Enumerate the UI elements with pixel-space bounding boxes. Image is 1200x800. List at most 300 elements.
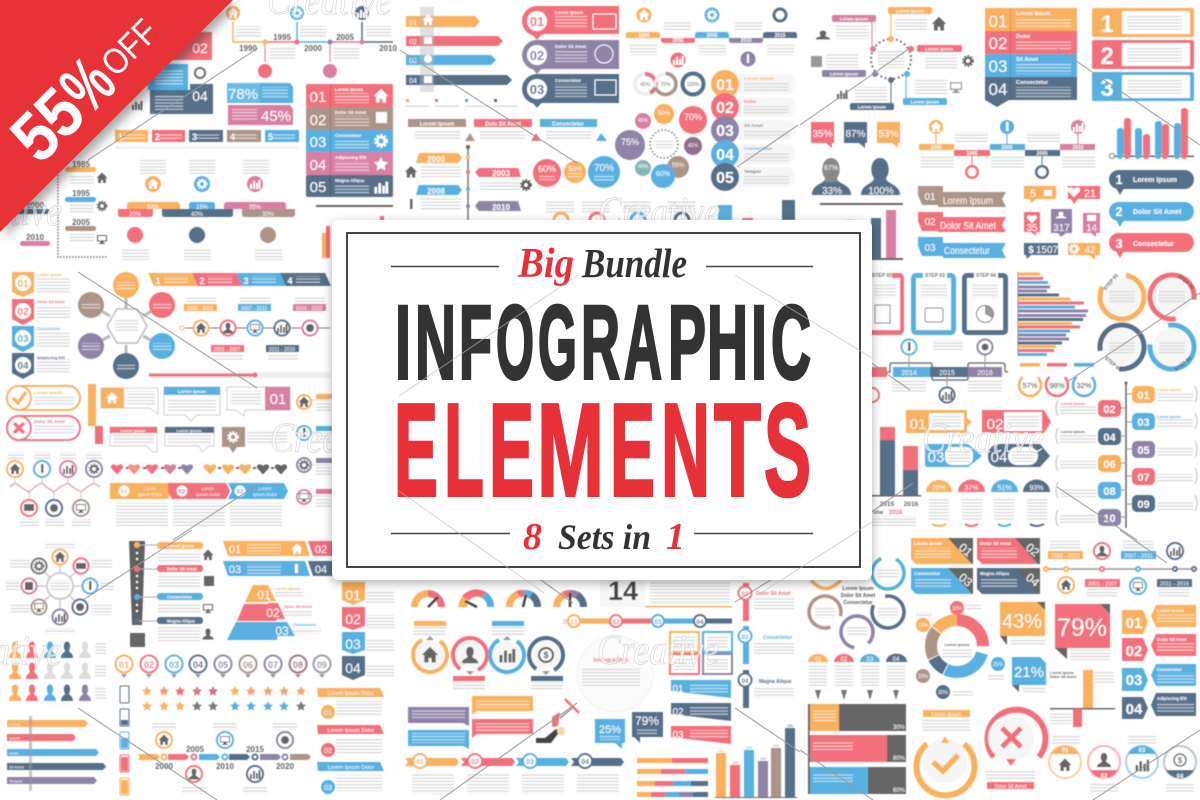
heading: 8 Sets in 1: Sets in xyxy=(558,517,651,557)
heading: ELEMENTS: L xyxy=(444,376,484,524)
social counters: 14 xyxy=(1086,223,1097,234)
stacked bar chart 2014-2016 xyxy=(860,427,921,526)
percent bars with icons: 20% xyxy=(129,212,142,218)
3D pyramid: 01 xyxy=(257,588,271,602)
inner frame xyxy=(347,233,860,567)
up down bar chart xyxy=(1050,670,1115,727)
arrow bar chart bottom left xyxy=(7,716,106,791)
arrow bar chart bottom left: Ipsum xyxy=(9,736,21,740)
heading: INFOGRAPHIC: G xyxy=(538,284,577,402)
timeline 1988-2016 top right xyxy=(1044,540,1196,597)
arrow panels 01-04 right: Adipiscing Elit xyxy=(1157,696,1187,701)
timeline with node circles xyxy=(180,296,330,361)
heading: Big Bundle: Big xyxy=(517,241,574,287)
stacked list 01-05: 02 xyxy=(310,112,326,129)
arrow text columns 01-04 xyxy=(405,754,624,794)
vertical timeline 1985-2010: 2005 xyxy=(72,218,90,227)
heading: INFOGRAPHIC: I xyxy=(751,284,767,402)
stacked list 01-05: Dolor Sit Amet xyxy=(335,110,367,115)
stacked list 01-04 with arrow: 01 xyxy=(989,12,1007,31)
location pin list 01-03: 01 xyxy=(530,14,544,29)
folded corner cards 01-04: Magna Aliqua xyxy=(980,571,1010,576)
heading: ELEMENTS: T xyxy=(714,376,761,524)
arrow timeline 2000-2020 xyxy=(138,721,311,794)
circle cluster diagram xyxy=(615,104,707,188)
timeline with node circles: 2016 - 2020 xyxy=(296,306,323,312)
step rings: STEP 01 xyxy=(1103,273,1120,292)
arrow bar chart bottom left: Lorem xyxy=(9,722,21,726)
arrow bar chart bottom left: Dolor xyxy=(9,750,19,756)
timeline 1990-2010 flat: 2000 xyxy=(1001,145,1013,151)
numbered pills: Lorem Ipsum xyxy=(1133,177,1177,184)
timeline 1990-2010: 2010 xyxy=(379,44,397,53)
heading: INFOGRAPHIC: A xyxy=(624,284,662,402)
heading: Big Bundle: Bundle xyxy=(581,240,687,286)
hero title panel xyxy=(332,220,872,580)
vertical timeline 01-10: 08 xyxy=(1103,486,1116,498)
exclamation timeline: Lorem Ipsum xyxy=(167,544,194,548)
stacked list 01-04 with arrow: 02 xyxy=(989,34,1007,53)
large percent folded cards xyxy=(1000,602,1110,693)
ribbon headers: Dolo Sit Amet xyxy=(485,122,521,128)
circular network diagram xyxy=(6,542,114,634)
social counters: 1507 xyxy=(1036,245,1059,256)
big number 14: 14 xyxy=(608,576,638,606)
step cards xyxy=(848,271,1008,335)
vertical timeline 1985-2010: 2000 xyxy=(26,201,44,210)
horizontal arrow bars: 03 xyxy=(409,58,417,65)
social counters: 21 xyxy=(1084,188,1096,200)
folded banners 01-03: 03 xyxy=(672,730,684,741)
parallelogram ribbons xyxy=(223,541,335,576)
vertical timeline 01-10: 10 xyxy=(1103,513,1116,525)
speech boxes row one: Lorem Ipsum xyxy=(178,389,206,394)
column chart six bars: 204 xyxy=(773,744,779,748)
circle list 01-05: 01 xyxy=(716,77,734,94)
vertical pin list 02-04: 04 xyxy=(742,679,749,685)
timeline 1990-2010 xyxy=(226,6,397,78)
numbered boxes 1-3: 2 xyxy=(1100,43,1114,70)
four icon rings: $ xyxy=(543,650,549,660)
ribbon labels 01-03: Dolor Sit Amet xyxy=(940,221,996,232)
numbered boxes 1-3 xyxy=(1092,8,1194,102)
cross ring: Dolor Sit Amet xyxy=(995,784,1027,790)
timeline 1988-2016 top right: 2007 - 2011 xyxy=(1124,554,1153,560)
circle cluster diagram: 41% xyxy=(688,143,699,149)
arrow panels 01-04 right: 03 xyxy=(1126,672,1142,689)
bar chart behind panel right xyxy=(820,203,903,260)
donut chart: 10% xyxy=(952,606,963,612)
step cards: STEP 03 xyxy=(925,273,945,279)
circle cluster diagram: 70% xyxy=(684,112,702,122)
heading: ELEMENTS: E xyxy=(394,376,438,524)
ribbon timeline 2000-2010 xyxy=(405,145,531,220)
3D pyramid: Dolor Sit Amet xyxy=(284,604,312,609)
3D pyramid: 02 xyxy=(266,606,280,620)
ribbon labels 01-03: 03 xyxy=(924,243,936,254)
percent pills column xyxy=(926,480,1050,526)
numbered pills: Dolor Sit Amet xyxy=(1133,209,1182,216)
badges 01-04 left: 01 xyxy=(17,279,29,290)
step parallelograms: 1 xyxy=(155,276,161,286)
stacked list 01-05: Magna Aliqua xyxy=(335,178,365,183)
timeline 1988-2016 top right: 2001 - 2007 xyxy=(1088,582,1117,588)
timeline 1990-2010: 2000 xyxy=(304,44,322,53)
ribbon list with circles: 03 xyxy=(324,785,332,792)
percent bars with icons: 50% xyxy=(147,205,160,211)
stacked list 01-04 with arrow: Sit Amet xyxy=(1016,57,1038,63)
boxed timeline 2014-2016: 2014 xyxy=(901,370,917,377)
numbered pins 01-09: 01 xyxy=(119,660,129,670)
ribbon list with circles: Lorem Ipsum Dolor xyxy=(328,728,375,734)
Creative Market watermarks: Creative xyxy=(270,416,392,462)
badges 01-04 left: Consectetur xyxy=(37,326,61,331)
vertical timeline 1985-2010: 1985 xyxy=(72,160,90,169)
exclamation timeline xyxy=(129,541,214,647)
ribbon list with circles: 01 xyxy=(324,710,332,717)
percent gauges 57 98 32: 57% xyxy=(1022,381,1038,390)
timeline 1990-2010 flat: 1990 xyxy=(930,145,942,151)
check and cross pills: Dolor Sit Amet xyxy=(34,419,66,424)
cross ring xyxy=(986,710,1046,790)
stacked bar chart 2014-2016: 2016 xyxy=(904,501,919,508)
timeline 1995-2015 with icons: 2000 xyxy=(672,38,684,44)
3D pyramid: 03 xyxy=(275,624,289,638)
timeline 1995-2015 with icons xyxy=(626,8,797,68)
timeline 1990-2010 flat: 2010 xyxy=(1072,145,1084,151)
vertical pin list 02-04: 02 xyxy=(742,592,749,598)
circular process with labels: Lorem Ipsum xyxy=(925,46,953,52)
sale corner banner xyxy=(0,0,233,232)
heading: ELEMENTS: S xyxy=(764,376,811,524)
percent speech badges 25 79: 79% xyxy=(635,714,659,728)
arrow panels 01-04 right: 01 xyxy=(1126,615,1142,632)
arrow text columns 01-04: 02 xyxy=(471,759,479,766)
horizontal arrow bars: 02 xyxy=(409,39,417,46)
speech boxes row two xyxy=(110,427,287,453)
folded corner cards 01-04: 03 xyxy=(956,570,975,590)
percent pills column: 37% xyxy=(964,485,979,492)
person percent figures: 67% xyxy=(824,165,838,172)
donut chart: 30% xyxy=(938,690,949,696)
circle list 01-05: Dolor xyxy=(744,99,757,105)
heading: INFOGRAPHIC: R xyxy=(581,284,620,402)
five numbered tabs: 5 xyxy=(268,132,273,142)
parallelogram ribbons: 04 xyxy=(315,564,327,576)
stacked list 01-04 with arrow: 04 xyxy=(989,80,1007,99)
gray progress panels: 60% xyxy=(893,788,906,794)
donut gauges: 100% xyxy=(687,82,700,88)
badges 01-04 below panel: 02 xyxy=(345,611,361,627)
circle list 01-05: Tempor xyxy=(744,169,761,175)
step rings: STEP 04 xyxy=(1103,356,1122,373)
big number 14 xyxy=(600,576,732,608)
ribbon list with circles xyxy=(317,688,384,794)
percent bars with icons xyxy=(118,160,295,260)
stacked list 01-05: Adipiscing Elit xyxy=(335,155,367,160)
3D pyramid: Lorem Ipsum xyxy=(275,586,301,591)
gray progress panels: 80% xyxy=(893,756,906,762)
large percent folded cards: 43% xyxy=(1002,611,1042,633)
parallelogram ribbons: 02 xyxy=(315,544,327,556)
column chart six bars: 193 xyxy=(746,746,752,750)
light watermark lines over panel xyxy=(399,275,872,593)
check ring: Lorem Ipsum xyxy=(932,712,961,718)
numbered pills xyxy=(1109,170,1194,258)
numbered pins 01-09: 02 xyxy=(144,660,154,670)
numbered arrow boxes 01-04 xyxy=(906,410,1051,467)
circle cards 01-04: $ xyxy=(1178,756,1183,765)
vertical timeline 01-10 xyxy=(1056,382,1197,528)
speech percent badges: 53% xyxy=(878,129,899,140)
badges 01-04 left: Lorem Ipsum xyxy=(37,272,63,277)
social counters: 35 xyxy=(1026,223,1038,234)
ribbon headers xyxy=(408,119,607,141)
sale corner banner: 5 xyxy=(19,73,99,153)
batteries xyxy=(120,686,129,795)
five numbered tabs: 2 xyxy=(155,132,160,142)
circle cards 01-04: 04 xyxy=(1177,774,1184,780)
numbered pins 01-09: 06 xyxy=(243,660,253,670)
heading: INFOGRAPHIC: P xyxy=(668,284,706,402)
percent pills column: 93% xyxy=(1029,485,1044,492)
circle cluster diagram: 55% xyxy=(672,163,685,169)
timeline with node circles: 2011 - 2016 xyxy=(269,347,295,353)
speech rectangles xyxy=(408,696,533,749)
horizontal arrow bars: 04 xyxy=(409,78,417,85)
sale corner banner: % xyxy=(45,42,130,127)
up down bar chart: Dolor Sit Amet xyxy=(1050,675,1077,679)
vertical timeline 01-10: 03 xyxy=(1137,417,1150,429)
five numbered tabs: 4 xyxy=(230,132,235,142)
check ring xyxy=(916,710,975,795)
circular process with labels: Lorem Ipsum xyxy=(830,72,858,76)
step arrow row 01-04: 01 xyxy=(570,619,578,626)
boxed timeline 2014-2016 xyxy=(860,340,1008,402)
Creative Market watermarks: Creative xyxy=(598,190,720,236)
step arrow row 01-04: 02 xyxy=(612,619,620,626)
heading: ELEMENTS: M xyxy=(537,376,604,524)
badges 01-04 left: 02 xyxy=(17,307,29,318)
panel: numbered folded labels 02 and 04: 04 xyxy=(192,88,208,104)
badges 01-04 left: 03 xyxy=(17,334,29,345)
heading: INFOGRAPHIC: F xyxy=(459,284,492,402)
vertical timeline 01-10: 05 xyxy=(1137,445,1150,457)
badges 01-04 below panel: 04 xyxy=(345,660,361,676)
arrow timeline 2000-2020: 2010 xyxy=(216,762,234,771)
timeline 1990-2010 flat xyxy=(919,120,1095,179)
star ratings xyxy=(142,686,306,710)
five numbered tabs: 1 xyxy=(118,132,123,142)
numbered boxes 1-3: 1 xyxy=(1100,11,1114,38)
white circle with Infographic label: Infographic xyxy=(593,657,629,664)
vertical timeline 01-10: 02 xyxy=(1103,404,1116,416)
location pin list 01-03: 02 xyxy=(530,48,544,63)
numbered pins 01-09: 04 xyxy=(193,660,203,670)
horizontal arrow bars xyxy=(406,7,518,108)
location pin list 01-03 xyxy=(522,6,619,108)
step arrow row 01-04: 03 xyxy=(654,619,662,626)
numbered pills: 3 xyxy=(1115,236,1123,251)
social counters: 317 xyxy=(1053,223,1070,234)
stacked list 01-05: Consectetur xyxy=(335,133,362,138)
numbered pins 01-09: 05 xyxy=(218,660,228,670)
timeline 1990-2010 flat: 2005 xyxy=(1036,151,1048,157)
location pin list 01-03: 03 xyxy=(530,82,544,97)
arrowhead pills 01-04 xyxy=(808,654,907,700)
arrow banners 01-03: Lorem xyxy=(259,486,272,491)
sale corner banner: OFF xyxy=(93,11,165,84)
numbered pins 01-09: 09 xyxy=(317,660,327,670)
column chart six bars: 146 xyxy=(760,757,766,761)
numbered arrow boxes 01-04: 02 xyxy=(987,416,1003,433)
timeline 1990-2010: 2005 xyxy=(336,33,354,42)
arrow panels 01-04 right: Lorem Ipsum xyxy=(1157,608,1184,613)
social counters: 5 xyxy=(1030,188,1036,200)
network of icons xyxy=(7,452,102,527)
folded corner cards 01-04: Lorem Ipsum xyxy=(914,541,942,546)
numbered boxes 1-3: 3 xyxy=(1100,75,1114,102)
heading: ELEMENTS: N xyxy=(661,376,710,524)
arrow text columns 01-04: 03 xyxy=(526,759,534,766)
parallelogram ribbons: 01 xyxy=(229,544,241,556)
percent gauges 57 98 32: 32% xyxy=(1076,381,1092,390)
Creative Market watermarks xyxy=(0,0,1044,675)
stacked list 01-04 with arrow xyxy=(985,8,1077,107)
speech boxes row one xyxy=(101,387,290,421)
vertical timeline 01-10: 01 xyxy=(1137,390,1150,402)
circle cluster diagram: 75% xyxy=(621,137,639,147)
boxed timeline 2014-2016: 2015 xyxy=(939,370,955,377)
circle list 01-05: 03 xyxy=(716,123,734,140)
column chart six bars: 285 xyxy=(787,724,793,728)
arrow banners 01-03: Ipsum Dolor xyxy=(138,492,163,497)
arrow banners 01-03: 02 xyxy=(179,490,186,496)
arrow banners 01-03 xyxy=(110,483,288,527)
badges 01-04 left: Adipiscing Elit xyxy=(37,355,65,360)
arrow timeline 2000-2020: 2020 xyxy=(276,762,294,771)
white circle with Infographic label xyxy=(577,636,653,712)
heading: Big Bundle xyxy=(391,240,813,287)
ribbon timeline 2000-2010: 2008 xyxy=(427,187,445,196)
vertical timeline 01-10: Lorem Ipsum xyxy=(1061,402,1085,406)
vertical pin list 02-04: Dolor Sit Amet xyxy=(756,591,791,597)
folded banners 01-03 xyxy=(671,680,731,744)
ribbon headers: Consectetur xyxy=(552,122,585,128)
panel: numbered folded labels 02 and 04 xyxy=(132,32,213,114)
heading: INFOGRAPHIC: O xyxy=(496,284,534,402)
person percent figures xyxy=(812,158,900,197)
3D pyramid: Consectetur xyxy=(293,622,317,627)
circle cards 01-04: 01 xyxy=(1062,748,1069,754)
step rings below panel xyxy=(804,551,910,651)
badges 01-04 left xyxy=(12,272,70,379)
stacked list 01-04 with arrow: 03 xyxy=(989,57,1007,76)
stacked list 01-05: 05 xyxy=(310,179,326,196)
circle cards 01-04: 03 xyxy=(1139,748,1146,754)
vertical timeline 01-10: Lorem Ipsum xyxy=(1157,388,1181,392)
step parallelograms xyxy=(148,273,331,286)
numbered pins 01-09: 08 xyxy=(293,660,303,670)
timeline with node circles: 2007 - 2011 xyxy=(241,306,267,312)
timeline 1990-2010: 1995 xyxy=(273,33,291,42)
percent circles 60 50 70 xyxy=(533,156,620,188)
speech boxes row one: 01 xyxy=(270,391,286,408)
percent gauges 57 98 32: 98% xyxy=(1049,381,1065,390)
percent circles 60 50 70: 70% xyxy=(594,163,614,174)
vertical timeline 01-10: 06 xyxy=(1103,459,1116,471)
percent circles 60 50 70: 60% xyxy=(538,164,556,174)
timeline 1995-2015 with icons: 2010 xyxy=(740,38,752,44)
check and cross pills xyxy=(7,386,80,440)
vertical timeline 01-10: 07 xyxy=(1137,472,1150,484)
arrow banners 01-03: Ipsum Dolor xyxy=(253,492,278,497)
circular process with labels: Lorem Ipsum xyxy=(840,16,868,22)
location pin list 01-03: Lorem Ipsum xyxy=(555,10,583,15)
step cards: STEP 04 xyxy=(976,273,996,279)
percent panels 78% and 45%: 78% xyxy=(228,86,258,103)
donut gauges: 45% xyxy=(640,82,651,88)
arrow timeline 2000-2020: 2015 xyxy=(246,745,264,754)
circle list 01-05: Lorem Ipsum xyxy=(744,76,774,82)
column chart six bars: 181 xyxy=(718,749,724,753)
percent bars with icons: 35% xyxy=(249,205,262,211)
five numbered tabs xyxy=(115,130,299,149)
badges 01-04 left: 04 xyxy=(17,361,29,372)
small bar chart behind panel xyxy=(316,205,393,258)
heading: 8 Sets in 1 xyxy=(391,516,813,558)
folded banners 01-03: 02 xyxy=(672,707,684,718)
numbered pins 01-09 xyxy=(116,656,330,678)
percent speech badges 25 79 xyxy=(595,712,663,749)
ribbon timeline 2000-2010: 2003 xyxy=(492,169,510,178)
percent speech badges 25 79: 25% xyxy=(599,724,621,736)
step rings: STEP 02 xyxy=(1176,274,1195,291)
arrowhead pills 01-04: 01 xyxy=(815,657,822,663)
timeline with node circles: 2001 - 2007 xyxy=(214,347,241,353)
arrow banners 01-03: 01 xyxy=(121,490,128,496)
circle list 01-05: 05 xyxy=(716,170,734,187)
icon list behind panel left xyxy=(297,394,332,508)
circle cluster diagram: 40% xyxy=(638,164,649,170)
numbered arrow boxes 01-04: 03 xyxy=(928,449,944,466)
vertical pin list 02-04: Consectetur xyxy=(763,635,792,641)
exclamation timeline: Magna Aliqua xyxy=(167,618,195,624)
arrow banners 01-03: Ipsum Dolor xyxy=(196,492,221,497)
arrow timeline 2000-2020: 2000 xyxy=(155,762,173,771)
folded banners 01-03: 01 xyxy=(672,684,684,695)
percent circles 60 50 70: 50% xyxy=(568,166,582,173)
badges 01-04 below panel xyxy=(342,582,394,680)
step rings: STEP 03 xyxy=(1174,355,1193,373)
circular process with labels: Lorem Ipsum xyxy=(896,8,924,14)
speech boxes row two: Lorem Ipsum xyxy=(176,428,202,433)
Creative Market watermarks: Creative xyxy=(597,628,719,674)
grouped bar chart xyxy=(1110,108,1194,159)
heading: INFOGRAPHIC: H xyxy=(707,284,748,402)
large percent folded cards: 79% xyxy=(1057,614,1107,642)
stacked list 01-04 with arrow: Dolor xyxy=(1016,34,1031,40)
step rings below panel: Lorem Ipsum xyxy=(842,586,874,592)
step rings xyxy=(1097,272,1197,373)
column chart six bars xyxy=(715,724,797,798)
arrow banners 01-03: Lorem xyxy=(202,486,215,491)
donut chart xyxy=(916,601,1005,699)
vertical timeline 01-10: 04 xyxy=(1103,432,1116,444)
circle list 01-05: 04 xyxy=(716,147,734,164)
percent pills column: 51% xyxy=(997,485,1012,492)
speech percent badges xyxy=(811,122,900,148)
